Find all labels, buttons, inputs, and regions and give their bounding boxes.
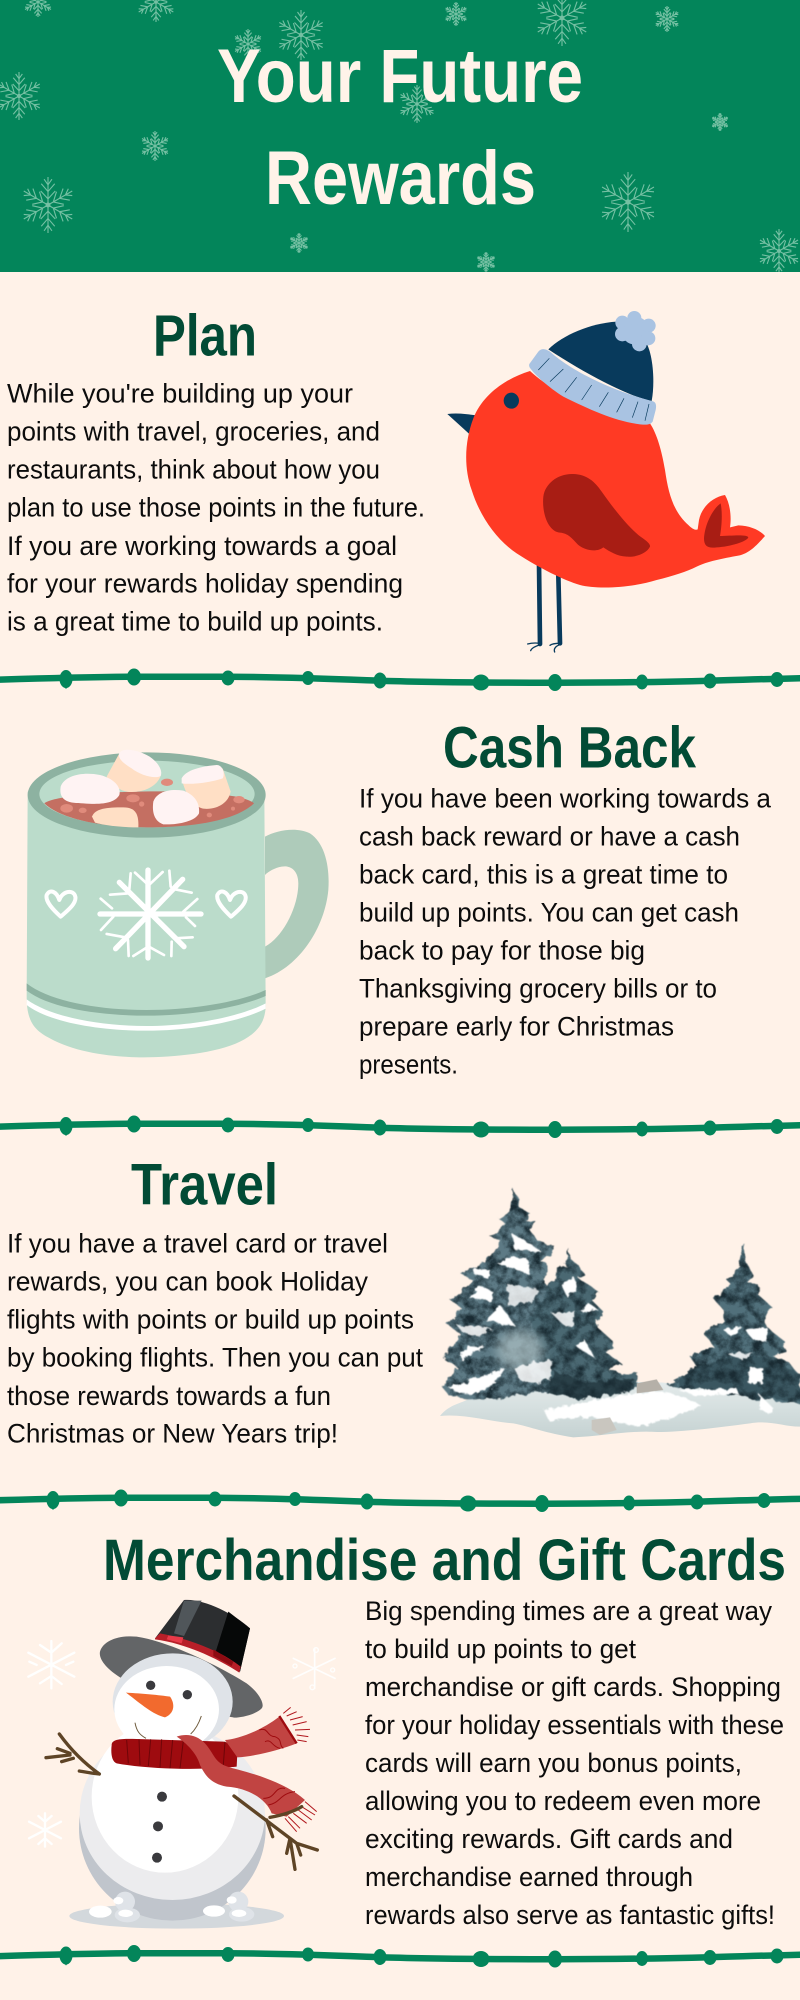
title <box>217 34 583 221</box>
text block: travel <box>7 1229 423 1449</box>
text block: travel: those rewards towards a fun <box>7 1381 331 1411</box>
text block: cash back: presents. <box>359 1050 458 1080</box>
icon: snowman <box>28 1600 335 1929</box>
text block: merchandise: Big spending times are a great way <box>365 1596 772 1626</box>
text block: merchandise: for your holiday essentials with these <box>365 1710 784 1740</box>
title: Your Future <box>217 34 583 119</box>
heading: plan: Plan <box>153 304 257 369</box>
panel: travel <box>7 1153 800 1449</box>
text block: merchandise <box>365 1596 784 1930</box>
panel: plan <box>7 304 765 652</box>
text block: merchandise: exciting rewards. Gift cards and <box>365 1824 733 1854</box>
title: Rewards <box>265 136 536 221</box>
text block: plan <box>7 379 425 637</box>
icon: bird with hat <box>447 311 765 652</box>
text block: merchandise: merchandise or gift cards. Shopping <box>365 1672 781 1702</box>
text block: travel: Christmas or New Years trip! <box>7 1419 338 1449</box>
heading: cash back: Cash Back <box>443 716 697 781</box>
divider: garland 1 <box>0 668 800 691</box>
text block: plan: While you're building up your <box>7 379 353 409</box>
text block: merchandise: to build up points to get <box>365 1634 636 1664</box>
text block: cash back: cash back reward or have a cash <box>359 822 740 852</box>
text block: plan: plan to use those points in the future. <box>7 493 425 523</box>
text block: cash back: back to pay for those big <box>359 936 645 966</box>
heading: travel: Travel <box>131 1153 278 1218</box>
text block: cash back <box>359 784 772 1080</box>
text block: merchandise: allowing you to redeem even more <box>365 1786 761 1816</box>
text block: travel: If you have a travel card or travel <box>7 1229 388 1259</box>
text block: cash back: Thanksgiving grocery bills or to <box>359 974 717 1004</box>
text block: plan: for your rewards holiday spending <box>7 569 403 599</box>
divider: garland 4 <box>0 1945 800 1968</box>
text block: travel: flights with points or build up points <box>7 1305 414 1335</box>
text block: merchandise: cards will earn you bonus points, <box>365 1748 742 1778</box>
icon: cocoa mug <box>27 750 329 1057</box>
panel: merchandise and gift cards <box>28 1528 786 1930</box>
text block: merchandise: rewards also serve as fantastic gifts! <box>365 1900 775 1930</box>
text block: travel: by booking flights. Then you can put <box>7 1343 423 1373</box>
text block: cash back: If you have been working towards a <box>359 784 772 814</box>
text block: cash back: back card, this is a great time to <box>359 860 728 890</box>
text block: plan: restaurants, think about how you <box>7 455 380 485</box>
text block: plan: is a great time to build up points. <box>7 607 383 637</box>
icon: snowy trees <box>440 1189 800 1437</box>
text block: cash back: build up points. You can get cash <box>359 898 739 928</box>
panel: cash back <box>27 716 772 1080</box>
text block: cash back: prepare early for Christmas <box>359 1012 674 1042</box>
divider: garland 2 <box>0 1116 800 1138</box>
text block: plan: points with travel, groceries, and <box>7 417 380 447</box>
header banner <box>0 0 800 273</box>
text block: merchandise: merchandise earned through <box>365 1862 693 1892</box>
text block: plan: If you are working towards a goal <box>7 531 397 561</box>
text block: travel: rewards, you can book Holiday <box>7 1267 368 1297</box>
divider: garland 3 <box>0 1490 800 1512</box>
